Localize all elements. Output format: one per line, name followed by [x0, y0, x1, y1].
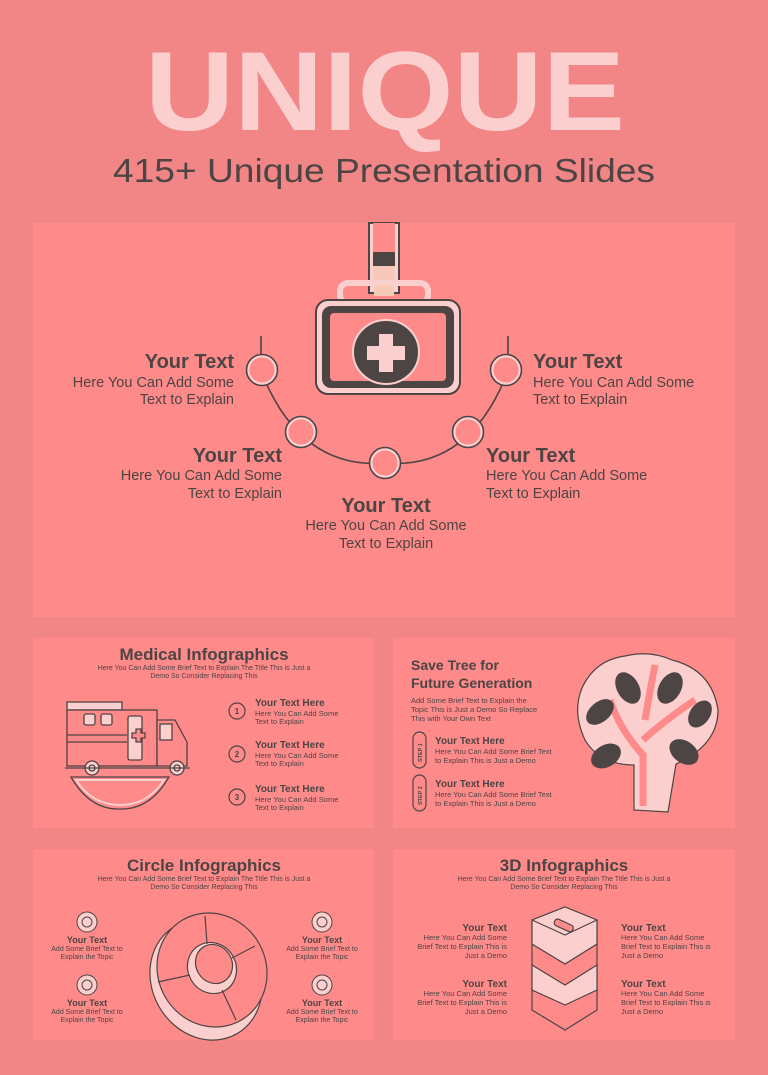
text: right middle [486, 445, 647, 502]
items [417, 923, 711, 1016]
description: Demo So Consider Replacing This [150, 884, 258, 891]
text: left middle: Here You Can Add Some [121, 468, 282, 484]
subtitle: 415+ Unique Presentation Slides [113, 152, 655, 189]
title: UNIQUE [145, 29, 625, 154]
items: Your Text [67, 935, 107, 945]
list items: Here You Can Add Some [255, 751, 338, 760]
list items: Text to Explain [255, 803, 304, 812]
items: Here You Can Add Some [424, 933, 507, 942]
list items: Here You Can Add Some [255, 795, 338, 804]
items: Here You Can Add Some [621, 933, 704, 942]
items: Brief Text to Explain This is [417, 942, 507, 951]
icon: tree [578, 654, 718, 812]
list items: Here You Can Add Some [255, 709, 338, 718]
heading: Save Tree for [411, 657, 499, 673]
steps: to Explain This is Just a Demo [435, 799, 536, 808]
items: Brief Text to Explain This is [621, 942, 711, 951]
items: Brief Text to Explain This is [417, 998, 507, 1007]
text: right top: Here You Can Add Some [533, 375, 694, 391]
text: bottom: Your Text [341, 495, 431, 517]
text: bottom [305, 495, 467, 552]
steps: STEP 2 [418, 786, 424, 805]
text: left middle: Your Text [193, 445, 282, 467]
heading [411, 657, 532, 691]
list items: 2 [235, 750, 240, 759]
description [411, 696, 537, 723]
list items: Text to Explain [255, 759, 304, 768]
icon: ambulance [65, 702, 190, 809]
icon: hand with medical kit [316, 223, 460, 394]
list items [229, 698, 338, 812]
description [98, 876, 311, 891]
steps [413, 732, 553, 811]
items: Add Some Brief Text to [51, 946, 123, 953]
steps: to Explain This is Just a Demo [435, 756, 536, 765]
description: This with Your Own Text [411, 714, 492, 723]
heading: 3D Infographics [500, 856, 628, 875]
items: Explain the Topic [61, 954, 114, 961]
items: Your Text [302, 935, 342, 945]
description: Here You Can Add Some Brief Text to Explain The Title This is Just a [98, 665, 311, 672]
description: Add Some Brief Text to Explain the [411, 696, 527, 705]
items: Your Text [302, 998, 342, 1008]
description: Demo So Consider Replacing This [150, 673, 258, 680]
icon: 3d ring [128, 893, 288, 1061]
list items: 3 [235, 793, 240, 802]
text: left top: Your Text [145, 351, 234, 373]
list items: Your Text Here [255, 740, 325, 751]
text: bottom: Here You Can Add Some [305, 518, 467, 534]
text: right top: Text to Explain [533, 392, 627, 408]
text: left middle: Text to Explain [188, 486, 282, 502]
items: Explain the Topic [296, 954, 349, 961]
description: Here You Can Add Some Brief Text to Explain The Title This is Just a [98, 876, 311, 883]
text: left top: Here You Can Add Some [73, 375, 234, 391]
items: Just a Demo [465, 951, 507, 960]
text: left middle [121, 445, 282, 502]
text: left top: Text to Explain [140, 392, 234, 408]
text: bottom: Text to Explain [339, 536, 433, 552]
text: right top: Your Text [533, 351, 623, 373]
list items: 1 [235, 707, 240, 716]
items: Your Text [462, 979, 508, 990]
description [98, 665, 311, 680]
description [458, 876, 671, 891]
items: Your Text [621, 923, 666, 934]
steps: STEP 1 [418, 743, 424, 762]
items: Explain the Topic [296, 1017, 349, 1024]
arc with nodes [246, 336, 522, 478]
steps: Your Text Here [435, 779, 505, 790]
steps: Your Text Here [435, 736, 505, 747]
list items: Your Text Here [255, 698, 325, 709]
list items: Your Text Here [255, 784, 325, 795]
items [51, 912, 358, 1024]
items: Explain the Topic [61, 1017, 114, 1024]
items: Your Text [621, 979, 666, 990]
items: Your Text [67, 998, 107, 1008]
description: Here You Can Add Some Brief Text to Explain The Title This is Just a [458, 876, 671, 883]
items: Here You Can Add Some [424, 989, 507, 998]
description: Demo So Consider Replacing This [510, 884, 618, 891]
panel: medical infographics [33, 638, 374, 828]
heading: Medical Infographics [119, 645, 289, 664]
panel: circle infographics [33, 849, 374, 1061]
steps: Here You Can Add Some Brief Text [435, 790, 553, 799]
items: Your Text [462, 923, 508, 934]
text: right middle: Your Text [486, 445, 576, 467]
items: Here You Can Add Some [621, 989, 704, 998]
heading: Future Generation [411, 675, 532, 691]
text: right middle: Text to Explain [486, 486, 580, 502]
text: right top [533, 351, 694, 408]
items: Add Some Brief Text to [286, 1009, 358, 1016]
items: Just a Demo [621, 951, 663, 960]
panel: 3D infographics [393, 849, 735, 1040]
items: Just a Demo [465, 1007, 507, 1016]
items: Just a Demo [621, 1007, 663, 1016]
heading: Circle Infographics [127, 856, 281, 875]
icon: stack [532, 907, 597, 1030]
panel: save tree [393, 638, 735, 828]
items: Brief Text to Explain This is [621, 998, 711, 1007]
description: Topic This is Just a Demo So Replace [411, 705, 537, 714]
text: left top [73, 351, 234, 408]
steps: Here You Can Add Some Brief Text [435, 747, 553, 756]
items: Add Some Brief Text to [51, 1009, 123, 1016]
items: Add Some Brief Text to [286, 946, 358, 953]
list items: Text to Explain [255, 717, 304, 726]
panel: medical kit [33, 223, 735, 617]
text: right middle: Here You Can Add Some [486, 468, 647, 484]
